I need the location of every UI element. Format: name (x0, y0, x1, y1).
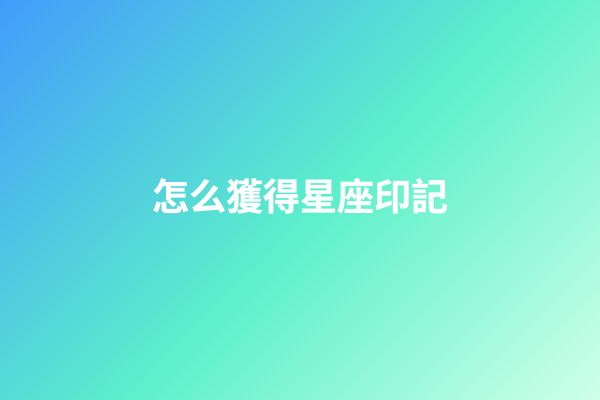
title: 怎么獲得星座印記 (152, 177, 448, 218)
